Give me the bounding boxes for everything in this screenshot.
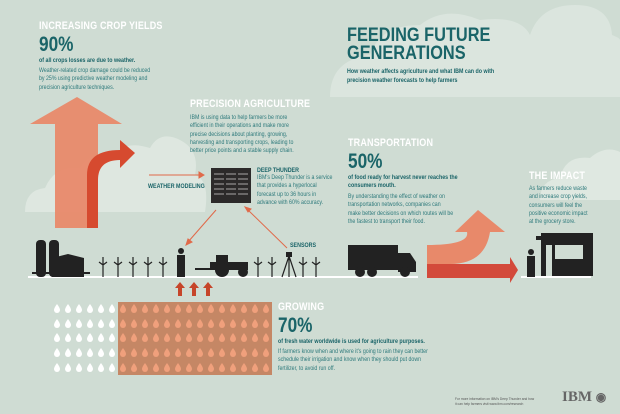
panel: transportation: of food ready for harvest never reaches the (348, 174, 458, 181)
subtitle: How weather affects agriculture and what IBM can do with (347, 68, 494, 75)
title (347, 25, 490, 64)
cloud: right (540, 150, 620, 200)
panel: crop yields: Weather-related crop damage could be reduced (39, 67, 150, 74)
panel: crop yields: INCREASING CROP YIELDS (39, 20, 163, 32)
panel: transportation: TRANSPORTATION (348, 137, 433, 149)
panel: transportation: By understanding the effect of weather on (348, 193, 445, 200)
panel: precision agriculture: efficient in their operations and make more (190, 122, 289, 129)
panel: the impact: As farmers reduce waste (529, 185, 587, 192)
footer note: For more information on IBM's Deep Thunder and how (455, 396, 534, 401)
panel: the impact: positive economic impact (529, 210, 588, 217)
panel: growing: of fresh water worldwide is used for agriculture purposes. (278, 338, 425, 345)
panel: growing (278, 301, 428, 372)
panel: growing: schedule their irrigation and know when they should put down (278, 356, 421, 363)
panel: crop yields: by 25% using predictive weather modeling and (39, 75, 147, 82)
footer note: it can help farmers visit www.ibm.com/research (455, 401, 523, 406)
panel: crop yields: 90% (39, 33, 73, 56)
label: weather modeling: WEATHER MODELING (148, 183, 205, 190)
panel: transportation: 50% (348, 150, 382, 173)
panel: transportation: consumers mouth. (348, 182, 396, 189)
title: GENERATIONS (347, 43, 466, 64)
label: sensors: SENSORS (290, 242, 316, 249)
panel: precision agriculture: IBM is using data to help farmers be more (190, 114, 287, 121)
ground lines (28, 276, 591, 278)
title: FEEDING FUTURE (347, 25, 490, 46)
panel: transportation (348, 137, 458, 225)
panel: the impact: consumers will feel the (529, 202, 582, 209)
arrows: up red (175, 282, 213, 296)
panel: transportation: the fastest to transport their food. (348, 218, 425, 225)
text: deep thunder: advance with 60% accuracy. (257, 199, 323, 206)
panel: precision agriculture (190, 98, 310, 154)
panel: precision agriculture: harvesting and transporting crops, leading to (190, 139, 293, 146)
panel: transportation: make better decisions on which routes will be (348, 210, 453, 217)
panel: growing: 70% (278, 314, 312, 337)
cloud: left (25, 136, 206, 212)
panel: crop yields (39, 20, 163, 91)
panel: precision agriculture: precise decisions about planting, growing, (190, 131, 287, 138)
text: deep thunder: forecast up to 36 hours in (257, 191, 316, 198)
panel: growing: If farmers know when and where it's going to rain they can better (278, 348, 428, 355)
panel: growing: fertilizer, to avoid run off. (278, 365, 335, 372)
text: deep thunder: IBM's Deep Thunder is a service (257, 174, 332, 181)
panel: growing: GROWING (278, 301, 324, 313)
panel: transportation: transportation networks, companies can (348, 201, 441, 208)
computer (211, 168, 251, 203)
panel: precision agriculture: PRECISION AGRICULTURE (190, 98, 310, 110)
panel: precision agriculture: better price points and a stable supply chain. (190, 147, 294, 154)
text: deep thunder: that provides a hyperlocal (257, 182, 317, 189)
panel: crop yields: precision agriculture techniques. (39, 84, 114, 91)
subtitle: precision weather forecasts to help farmers (347, 77, 457, 84)
arrows: data flow (149, 172, 287, 248)
icons: farm (32, 233, 593, 277)
panel: the impact (529, 170, 588, 225)
panel: the impact: THE IMPACT (529, 170, 585, 182)
cloud: title (330, 5, 620, 97)
footer note (455, 396, 534, 406)
panel: the impact: at the grocery store. (529, 218, 576, 225)
text: deep thunder: DEEP THUNDER (257, 167, 299, 174)
water panel (118, 302, 272, 375)
logo: IBM: IBM ◉ (562, 389, 606, 405)
panel: the impact: and increase crop yields, (529, 193, 587, 200)
text: deep thunder (257, 167, 332, 206)
panel: crop yields: of all crops losses are due to weather. (39, 57, 135, 64)
arrow: transport (427, 210, 518, 283)
arrow: crop yields (30, 97, 135, 228)
subtitle (347, 68, 494, 84)
